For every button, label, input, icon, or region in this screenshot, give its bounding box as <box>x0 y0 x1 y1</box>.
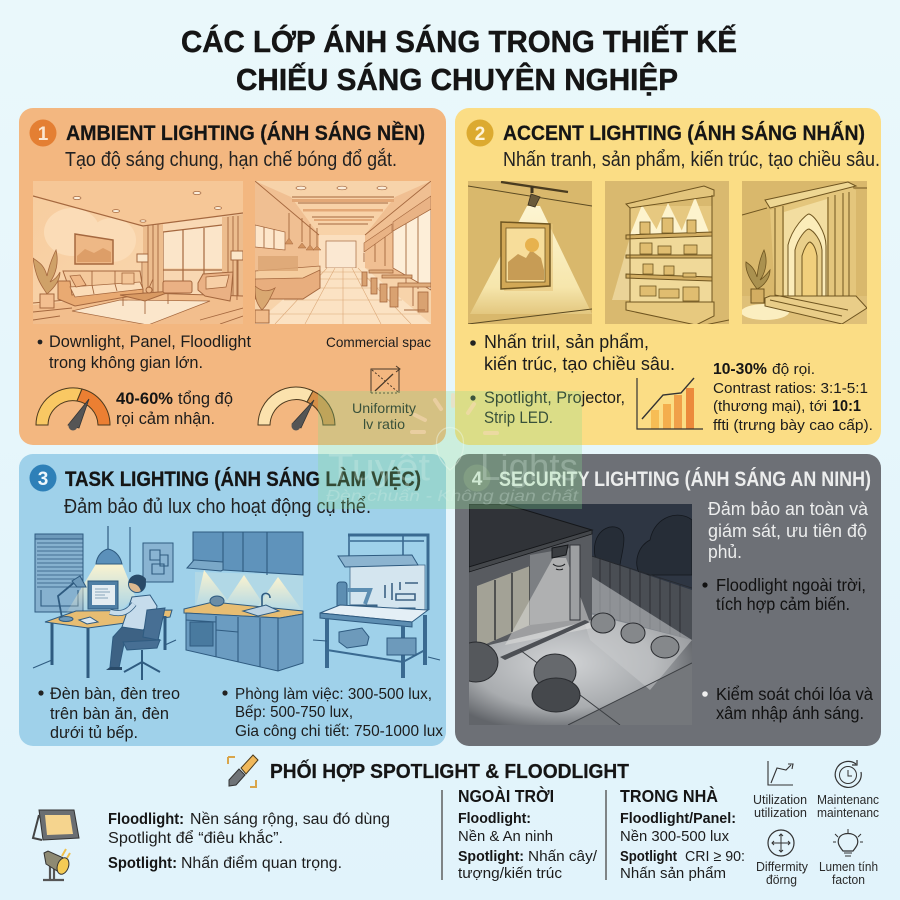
metric: utilization: utilization <box>754 806 807 820</box>
icon: spotlight <box>43 849 71 880</box>
bar chart <box>637 378 703 429</box>
text: floodlight and spotlight roles: Spotlight: <box>108 855 177 872</box>
gauge stat text: 40-60% <box>116 389 233 428</box>
column: outdoor: Floodlight: <box>458 810 531 827</box>
stat: contrast ratios: 10:1 <box>832 398 861 415</box>
text: floodlight and spotlight roles: Spotlight để “điêu khắc”. <box>108 830 283 847</box>
column: outdoor <box>458 785 598 882</box>
bullet: downlight panel floodlight <box>38 332 251 372</box>
gauge 1 <box>36 388 110 430</box>
text: floodlight and spotlight roles <box>108 811 390 872</box>
intro: security purpose: phủ. <box>708 541 742 562</box>
bullet: lux targets: Bếp: 500-750 lux, <box>235 704 353 721</box>
label: uniformity ratio: lv ratio <box>363 416 405 432</box>
subtitle: ambient: Tạo độ sáng chung, hạn chế bóng đổ gắt. <box>65 148 397 171</box>
column: indoor: CRI ≥ 90: <box>685 848 745 865</box>
metric: utilization: Utilization <box>753 793 807 807</box>
column: indoor: TRONG NHÀ <box>620 785 718 806</box>
section: spotlight and floodlight <box>33 755 879 887</box>
subtitle: task: Đảm bảo đủ lux cho hoạt động cụ thể. <box>64 496 371 518</box>
bullet: downlight panel floodlight: trong không gian lớn. <box>49 353 203 372</box>
bullet: task fixtures: dưới tủ bếp. <box>50 723 138 742</box>
illustration: living room <box>33 181 243 325</box>
illustration: night house <box>454 504 692 725</box>
bullet: lux targets <box>222 686 443 740</box>
metric: lumen factor <box>819 829 878 887</box>
column: outdoor: NGOÀI TRỜI <box>458 785 554 806</box>
number badge 3: 3 <box>38 469 48 490</box>
column: outdoor: Nhấn cây/ <box>528 848 598 865</box>
bullet: task fixtures <box>38 684 180 742</box>
stat: contrast ratios: ffti (trưng bày cao cấp). <box>713 417 873 434</box>
metric: difformity: Differmity <box>756 860 809 874</box>
illustration: kitchen <box>184 532 303 671</box>
label: commercial space: Commercial spac <box>326 334 431 350</box>
intro: security purpose: Đảm bảo an toàn và <box>708 498 869 519</box>
metric: lumen factor: Lumen tính <box>819 860 878 874</box>
column: indoor: Floodlight/Panel: <box>620 810 736 827</box>
bullet: task fixtures: trên bàn ăn, đèn <box>50 704 169 723</box>
title: CHIẾU SÁNG CHUYÊN NGHIỆP <box>236 61 678 97</box>
panel: accent lighting <box>455 108 881 445</box>
number badge 2 <box>466 120 494 146</box>
title: CÁC LỚP ÁNH SÁNG TRONG THIẾT KẾ <box>181 23 737 59</box>
bullet: accent purpose <box>470 331 675 374</box>
text: floodlight and spotlight roles: Nền sáng rộng, sau đó dùng <box>190 811 390 828</box>
bullet: outdoor floodlight: tích hợp cảm biến. <box>716 594 850 614</box>
gauge stat text: 40-60%: rọi cảm nhận. <box>116 409 215 428</box>
bullet: spotlight projector <box>470 388 625 427</box>
metric: maintenance <box>817 760 879 820</box>
heading: accent: ACCENT LIGHTING (ÁNH SÁNG NHẤN) <box>503 122 865 145</box>
stat: contrast ratios: Contrast ratios: 3:1-5:1 <box>713 380 868 397</box>
column: outdoor: tượng/kiến trúc <box>458 865 563 882</box>
number badge 2: 2 <box>475 124 485 145</box>
illustration: home office <box>33 526 176 680</box>
number badge 3 <box>30 464 56 492</box>
watermark: Tuyệt <box>328 447 430 489</box>
column: indoor: Spotlight <box>620 848 677 865</box>
bullet: outdoor floodlight: Floodlight ngoài trời, <box>716 575 866 595</box>
bullet: spotlight projector: Strip LED. <box>484 408 553 427</box>
intro: security purpose <box>708 498 869 562</box>
label: uniformity ratio <box>352 400 416 432</box>
illustration: framed picture <box>468 181 592 324</box>
label: uniformity ratio: Uniformity <box>352 400 416 416</box>
text: floodlight and spotlight roles: Nhấn điểm quan trọng. <box>181 855 342 872</box>
metric: difformity: đörng <box>766 873 797 887</box>
gauge 2 <box>258 387 335 430</box>
watermark: Lights <box>480 447 578 489</box>
icon: uniformity <box>371 366 400 393</box>
number badge 1 <box>30 120 56 146</box>
stat: contrast ratios: 10-30% <box>713 361 767 378</box>
column: outdoor: Spotlight: <box>458 848 524 865</box>
stat: contrast ratios: độ rọi. <box>772 361 815 378</box>
gauge stat text: 40-60%: tổng độ <box>178 389 233 408</box>
bullet: glare control: Kiểm soát chói lóa và <box>716 684 873 704</box>
bullet: accent purpose: kiến trúc, tạo chiều sâu. <box>484 353 675 374</box>
watermark: Đèn chuẩn - Không gian chất <box>326 487 579 505</box>
bullet: lux targets: Phòng làm việc: 300-500 lux, <box>235 686 432 703</box>
bullet: spotlight projector: Spotlight, Projector, <box>484 388 625 407</box>
heading: task: TASK LIGHTING (ÁNH SÁNG LÀM VIỆC) <box>65 467 421 491</box>
column: indoor: Nhấn sản phẩm <box>620 865 726 882</box>
number badge 4 <box>464 464 490 492</box>
panel: task lighting <box>19 454 446 746</box>
metric: utilization <box>753 761 807 820</box>
title <box>181 23 737 97</box>
gauge stat text: 40-60%: 40-60% <box>116 389 173 408</box>
bullet: downlight panel floodlight: Downlight, Panel, Floodlight <box>49 332 251 351</box>
illustration: workbench <box>313 535 440 678</box>
heading: ambient: AMBIENT LIGHTING (ÁNH SÁNG NỀN) <box>66 122 425 145</box>
icon: crossed lights <box>228 755 258 787</box>
bullet: glare control: xâm nhập ánh sáng. <box>716 703 864 723</box>
text: floodlight and spotlight roles: Floodlight: <box>108 811 184 828</box>
metric: difformity <box>756 830 809 887</box>
icon: floodlight <box>33 810 79 840</box>
watermark <box>318 391 582 509</box>
heading: combination: PHỐI HỢP SPOTLIGHT & FLOODLIGHT <box>270 759 629 783</box>
bullet: task fixtures: Đèn bàn, đèn treo <box>50 684 180 703</box>
bullet: accent purpose: Nhấn triıl, sản phẩm, <box>484 331 649 352</box>
illustration: commercial space <box>255 181 431 324</box>
stat: contrast ratios <box>713 361 873 434</box>
bullet: glare control <box>702 684 873 723</box>
column: indoor: Nền 300-500 lux <box>620 828 729 845</box>
intro: security purpose: giám sát, ưu tiên độ <box>708 520 867 541</box>
metric: lumen factor: facton <box>832 873 865 887</box>
panel: security lighting <box>454 454 881 746</box>
metric: maintenance: Maintenanc <box>817 793 879 807</box>
number badge 1: 1 <box>38 124 49 145</box>
column: outdoor: Nền & An ninh <box>458 828 553 845</box>
column: indoor <box>620 785 745 882</box>
bullet: lux targets: Gia công chi tiết: 750-1000 lux <box>235 723 443 740</box>
illustration: display shelf <box>605 181 729 326</box>
stat: contrast ratios: (thương mại), tới <box>713 398 827 415</box>
number badge 4: 4 <box>472 469 483 490</box>
metric: maintenance: maintenanc <box>817 806 879 820</box>
bullet: outdoor floodlight <box>702 575 866 614</box>
illustration: lit arch <box>741 181 867 324</box>
panel: ambient lighting <box>19 108 446 445</box>
